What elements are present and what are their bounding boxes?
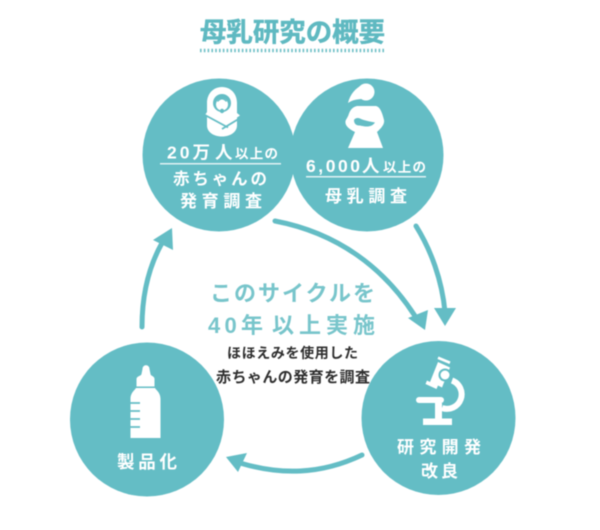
panel: R&D circle — [362, 341, 516, 495]
panel: breast milk survey circle — [290, 78, 444, 232]
panel: infant survey circle — [142, 78, 296, 232]
panel: infant survey circle: 人 — [215, 142, 233, 162]
icon: baby bottle — [130, 365, 160, 438]
text: infant development: 赤ちゃんの — [173, 170, 267, 188]
text: cycle heading: 40年 — [208, 313, 263, 338]
arrow: R&D to productization — [226, 453, 362, 472]
divider line — [306, 176, 426, 178]
icon: swaddled baby — [204, 87, 241, 136]
text: 200,000 infants: 20万 — [167, 142, 210, 162]
text: cycle heading: 以上実施 — [272, 313, 375, 338]
panel: productization circle — [70, 342, 224, 496]
text: cycle heading: このサイクルを — [210, 281, 375, 306]
icon: mother holding baby — [345, 84, 384, 148]
text: cycle description: 赤ちゃんの発育を調査 — [216, 368, 370, 386]
text: cycle heading — [208, 281, 375, 338]
arrow: productization to infant survey — [142, 228, 173, 327]
arrow: infant survey to R&D — [275, 221, 428, 330]
panel: breast milk survey circle: 以上の — [383, 160, 426, 175]
divider line — [160, 163, 281, 164]
icon: microscope — [416, 356, 462, 425]
text: improvement label: 改良 — [421, 461, 458, 481]
text: R&D label: 研究開発 — [397, 438, 481, 457]
text: cycle description: ほほえみを使用した — [227, 345, 358, 361]
arrow: milk survey to R&D — [416, 226, 456, 326]
title: 母乳研究の概要 — [200, 18, 385, 48]
text: milk survey: 母乳調査 — [325, 187, 407, 206]
panel: infant survey circle: 以上の — [235, 146, 278, 162]
panel: breast milk survey circle: 人 — [362, 156, 380, 176]
text: 6,000 mothers: 6,000 — [306, 156, 360, 176]
text: survey: 発育調査 — [180, 192, 262, 211]
text: cycle description — [216, 345, 370, 386]
text: productization label: 製品化 — [117, 452, 178, 472]
